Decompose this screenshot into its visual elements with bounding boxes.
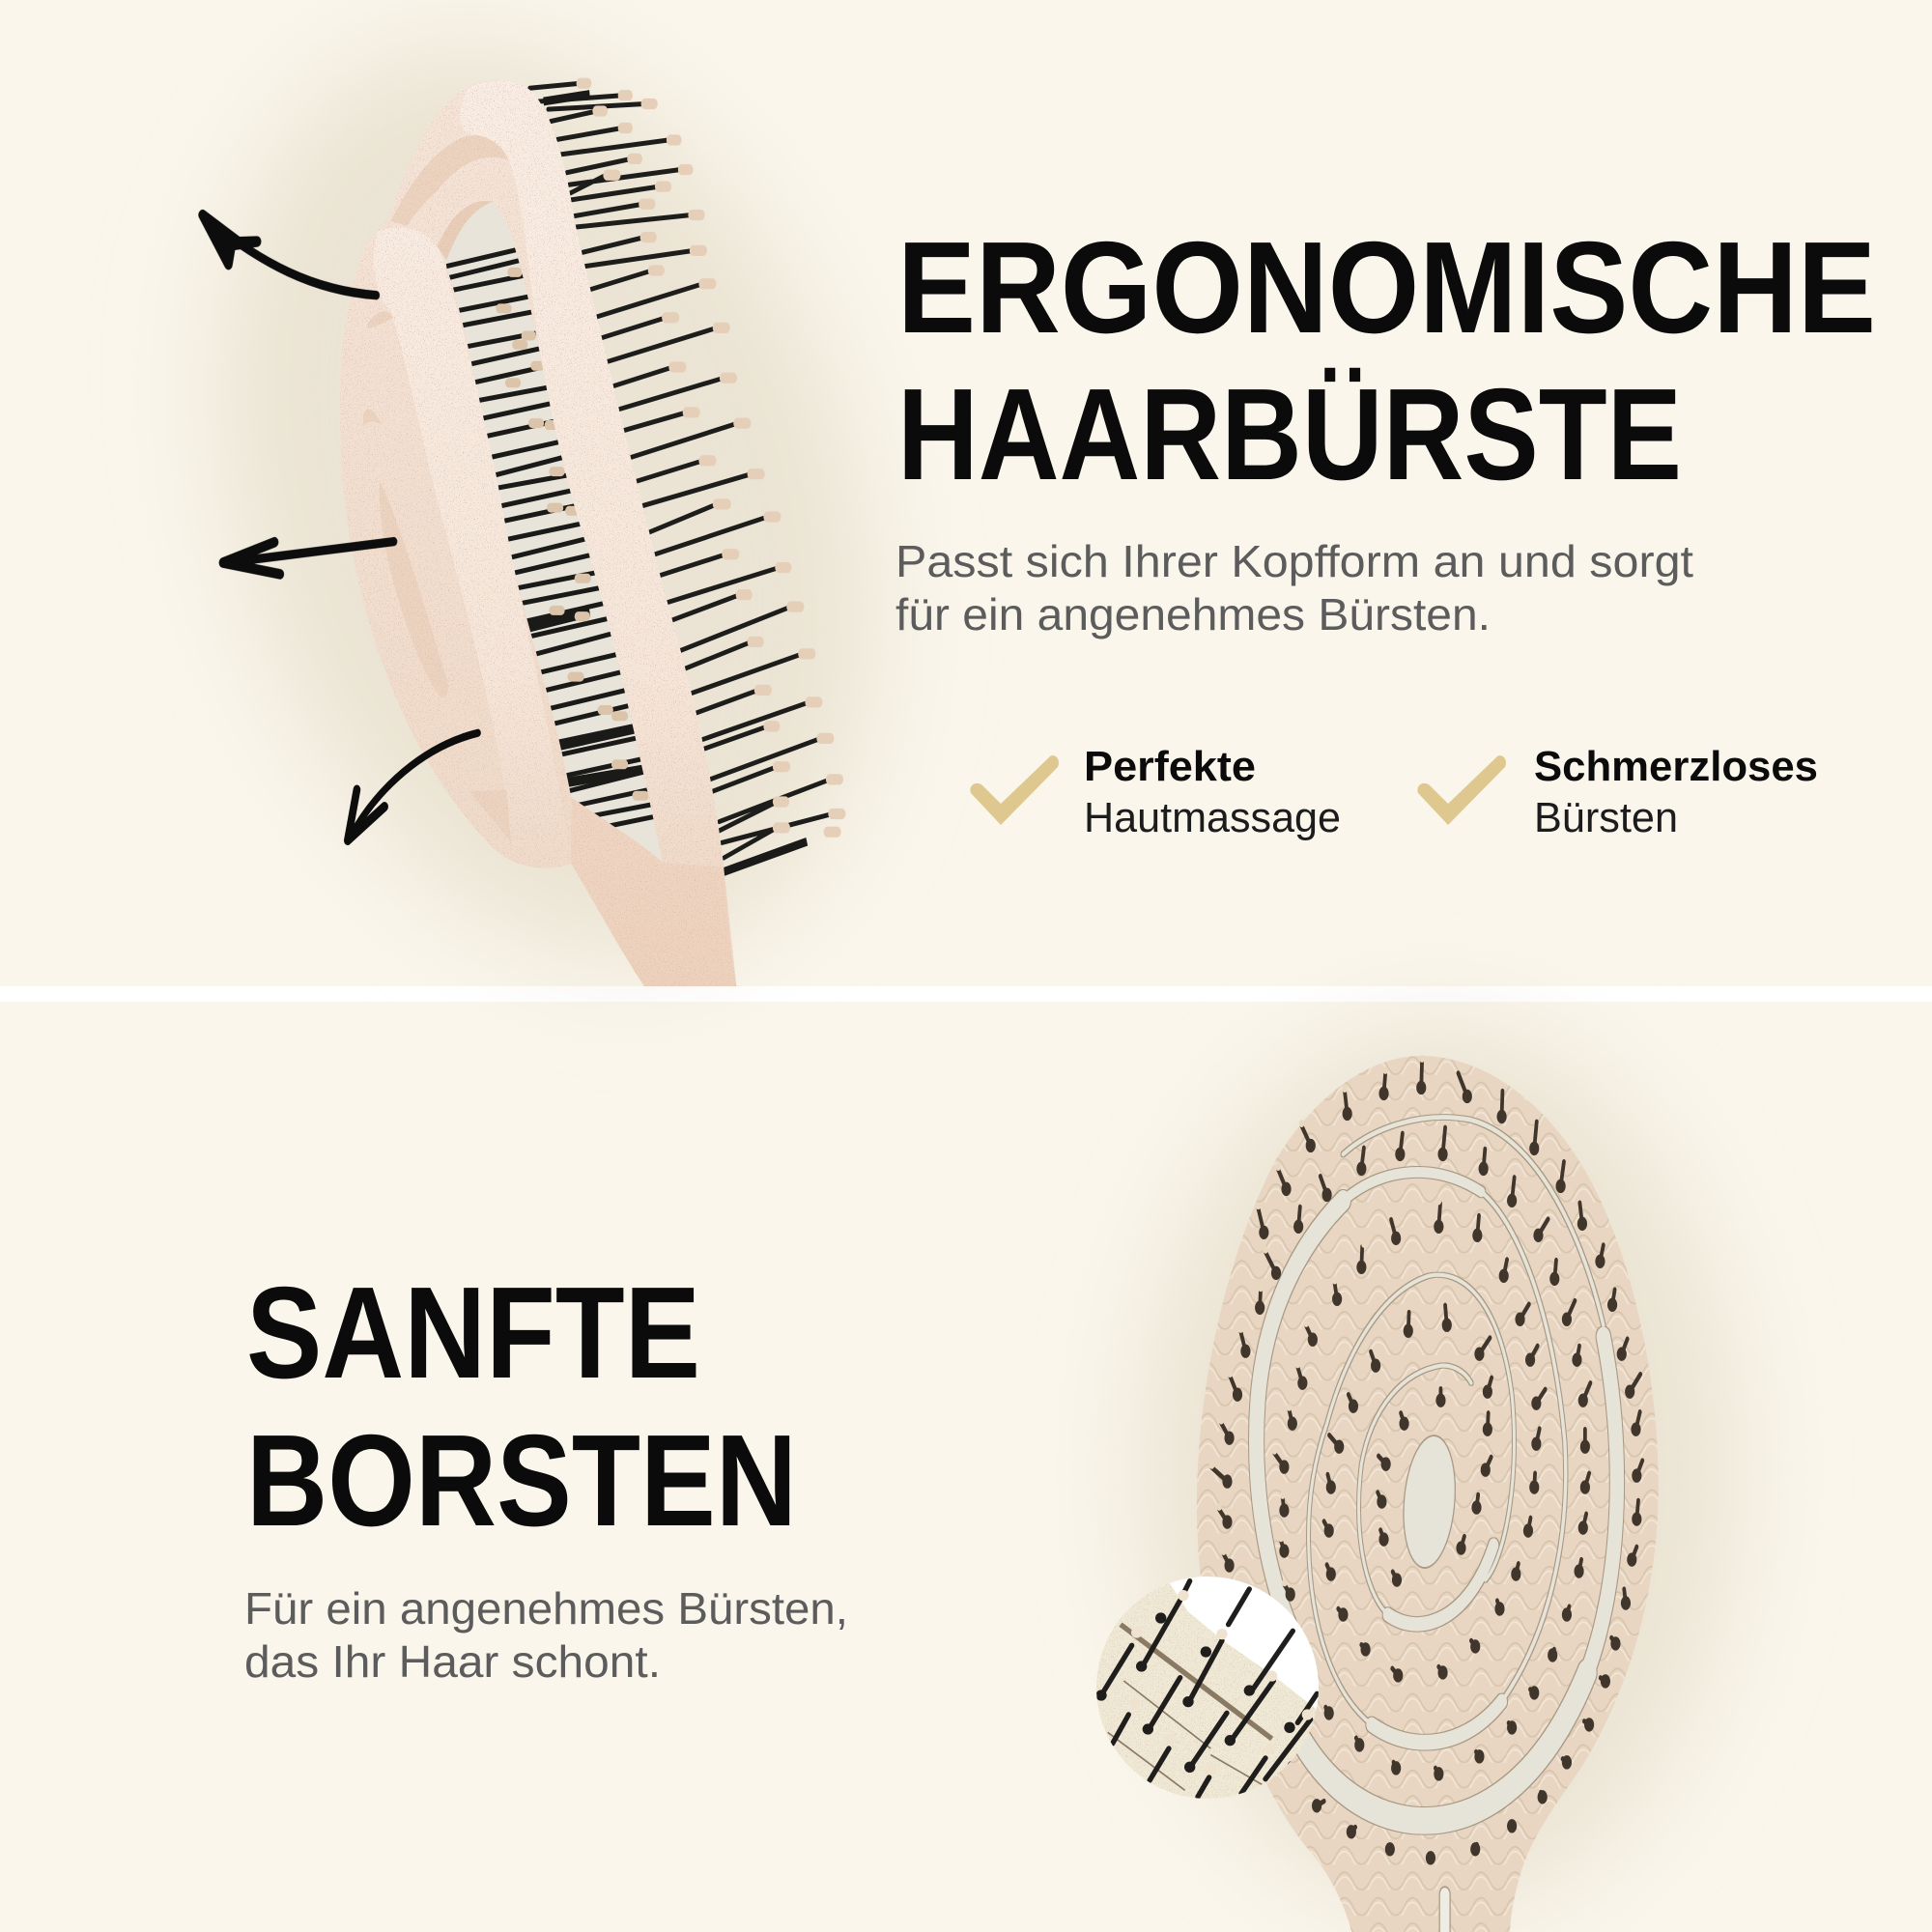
description: top <box>895 536 1693 639</box>
bristles <box>1101 1581 1317 1797</box>
outer bristles <box>529 83 841 871</box>
brush silhouette <box>1197 1056 1659 1932</box>
feature text <box>1534 743 1818 841</box>
feature text <box>1084 743 1341 841</box>
description: top: Passt sich Ihrer Kopfform an und sorgt <box>895 536 1693 586</box>
description: bottom: Für ein angenehmes Bürsten, <box>244 1583 848 1634</box>
spiral gaps <box>1257 1118 1617 1821</box>
top band highlight <box>460 80 724 867</box>
feature text: Bürsten <box>1534 794 1678 841</box>
inset: bristle close-up circle <box>1092 1575 1323 1800</box>
rib sticks <box>1108 1625 1272 1790</box>
feature text: Perfekte <box>1084 743 1256 790</box>
title: sanfte borsten: BORSTEN <box>246 1407 797 1553</box>
arrow: top <box>203 214 376 296</box>
brush: front view spiral <box>1197 1056 1659 1932</box>
feature: schmerzloses bürsten <box>1417 743 1818 841</box>
icon: check <box>1417 755 1506 825</box>
arrow: middle <box>223 542 394 574</box>
divider band <box>0 986 1932 1002</box>
title: ergonomische haarbürste <box>897 214 1876 507</box>
description: top: für ein angenehmes Bürsten. <box>895 589 1491 639</box>
handle slot <box>1439 1887 1450 1932</box>
title: ergonomische haarbürste: HAARBÜRSTE <box>897 361 1682 507</box>
title: sanfte borsten <box>246 1260 797 1553</box>
handle shading <box>571 798 737 987</box>
wave texture <box>1197 1056 1659 1932</box>
feature text: Hautmassage <box>1084 794 1341 841</box>
front band <box>373 228 550 744</box>
textured base <box>1092 1575 1323 1800</box>
feature: perfekte hautmassage <box>970 743 1341 841</box>
icon: check <box>970 755 1059 825</box>
brush: side view with bristles <box>340 80 841 988</box>
center hole <box>1398 1431 1461 1573</box>
brush body <box>340 80 737 988</box>
shaded hollows <box>363 135 511 842</box>
opening with inner bristles <box>446 247 653 827</box>
bristle pegs <box>1211 1059 1642 1858</box>
description: bottom: das Ihr Haar schont. <box>244 1636 661 1687</box>
title: sanfte borsten: SANFTE <box>246 1260 700 1406</box>
white backdrop <box>1170 1577 1319 1710</box>
arrow: bottom <box>348 733 478 840</box>
feature text: Schmerzloses <box>1534 743 1818 790</box>
description: bottom <box>244 1583 848 1687</box>
